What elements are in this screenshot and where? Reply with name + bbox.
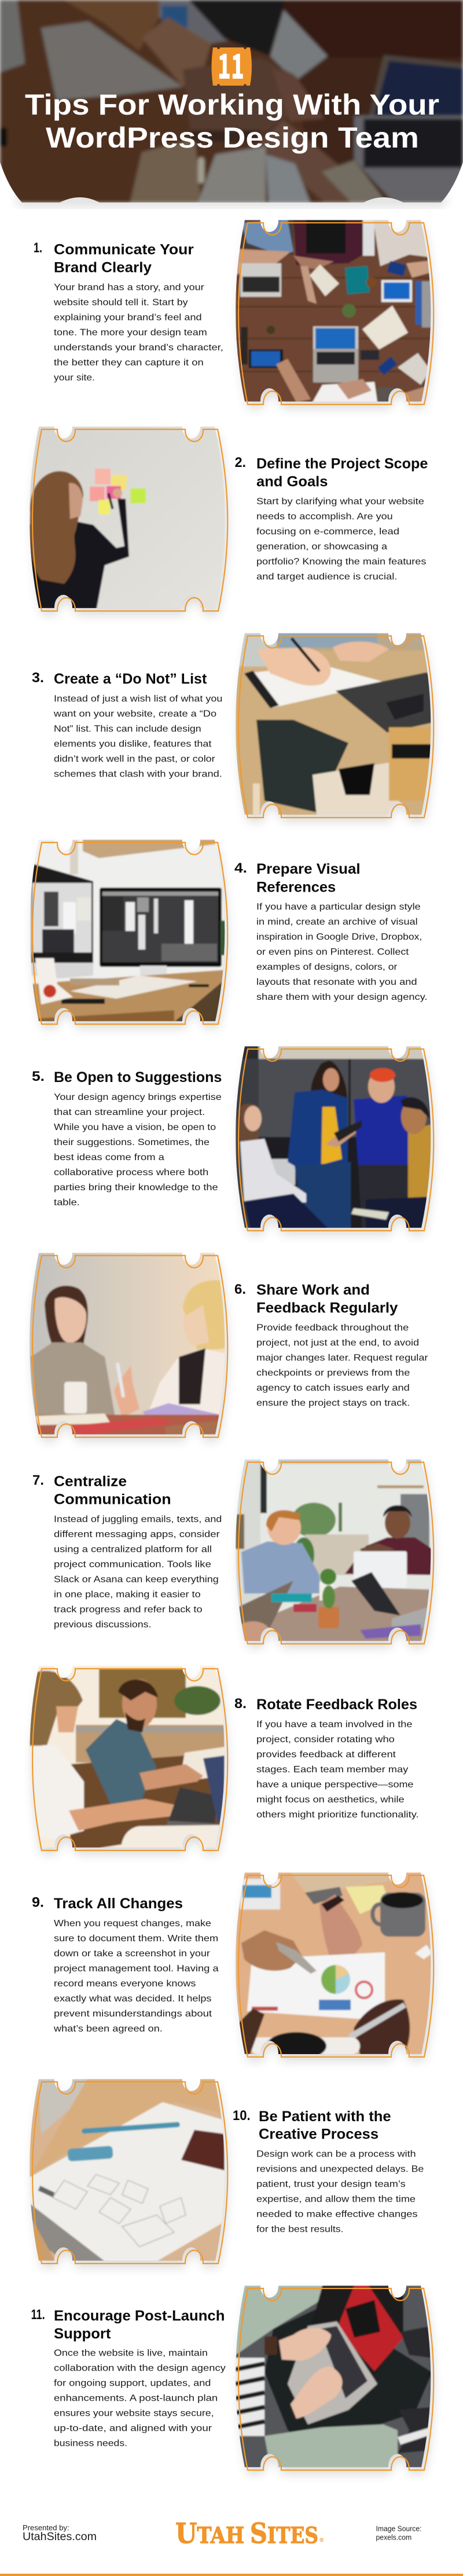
body text: layouts that resonate with you and — [256, 977, 417, 987]
body text: sure to document them. Write them — [54, 1934, 218, 1944]
body text: agency to catch issues early and — [256, 1383, 410, 1393]
photo: person typing on a laptop on their lap — [236, 2286, 432, 2468]
number: 6. — [234, 1282, 246, 1297]
footer: Utah Sites logo — [175, 2518, 324, 2550]
panel: header — [0, 0, 463, 203]
heading: References — [256, 879, 336, 896]
body text: table. — [54, 1198, 80, 1208]
card shadow — [32, 433, 227, 615]
photo: two people typing on laptops at a cafe — [30, 1666, 226, 1848]
photo: hands reviewing charts on a table — [236, 1872, 432, 2060]
header shadow — [17, 194, 446, 207]
body text: in one place, making it easier to — [54, 1590, 201, 1600]
body text: provides feedback at different — [256, 1750, 396, 1760]
heading: Communicate Your — [54, 241, 194, 257]
body text: their suggestions. Sometimes, the — [54, 1138, 210, 1147]
body text: or even pins on Pinterest. Collect — [256, 947, 409, 957]
body text: needed to make effective changes — [256, 2210, 418, 2220]
panel: tip 11 — [31, 2286, 433, 2474]
body text — [53, 1919, 219, 2034]
body text — [54, 1515, 222, 1630]
panel: tip 2 — [30, 426, 428, 615]
body text: and target audience is crucial. — [256, 572, 397, 582]
panel: tip 7 — [32, 1459, 433, 1648]
body text: schemes that clash with your brand. — [54, 770, 222, 779]
heading: Communication — [54, 1491, 171, 1507]
footer: image source: pexels.com — [376, 2533, 411, 2541]
body text: project, consider rotating who — [256, 1735, 395, 1745]
photo: team at wooden table from above — [236, 220, 432, 402]
body text: major changes later. Request regular — [256, 1353, 428, 1363]
heading — [54, 2308, 225, 2342]
body text: collaboration with the design agency — [54, 2364, 226, 2373]
body text: If you have a particular design style — [256, 902, 421, 912]
footer: image source: Image Source: — [376, 2525, 421, 2533]
body text: parties bring their knowledge to the — [54, 1183, 218, 1193]
body text — [54, 2349, 226, 2449]
body text: portfolio? Knowing the main features — [256, 557, 426, 567]
footer: image source — [376, 2525, 421, 2541]
body text: previous discussions. — [54, 1620, 151, 1630]
number: 4. — [234, 860, 247, 876]
body text: enhancements. A post-launch plan — [54, 2394, 218, 2404]
body text — [53, 282, 223, 382]
card shadow — [32, 1260, 227, 1441]
body text — [256, 1720, 419, 1820]
heading: Track All Changes — [54, 1896, 183, 1912]
body text: needs to accomplish. Are you — [256, 511, 393, 522]
heading: Prepare Visual — [256, 861, 361, 877]
footer: presented by: Presented by: — [23, 2523, 69, 2532]
body text: for the best results. — [256, 2225, 344, 2235]
heading — [54, 1474, 171, 1507]
body text: expertise, and allow them the time — [256, 2195, 416, 2205]
number: 3. — [32, 670, 44, 686]
footer: presented by — [23, 2523, 97, 2543]
body text: focusing on e-commerce, lead — [256, 527, 399, 537]
card shadow — [238, 227, 433, 409]
body text: might focus on aesthetics, while — [256, 1795, 405, 1805]
body text — [256, 1323, 428, 1408]
body text: Provide feedback throughout the — [256, 1323, 409, 1333]
body text: the better they can capture it on — [54, 358, 204, 367]
body text: Not” list. This can include design — [54, 724, 201, 734]
card outline — [32, 1669, 227, 1850]
body text: using a centralized platform for all — [54, 1545, 212, 1555]
body text: Slack or Asana can keep everything — [54, 1575, 219, 1585]
heading: Support — [54, 2325, 111, 2342]
card outline — [32, 842, 227, 1024]
footer: Utah Sites logo: SITES — [250, 2518, 318, 2550]
title: Tips For Working With Your — [25, 89, 439, 121]
body text: project management tool. Having a — [54, 1964, 219, 1974]
card outline — [32, 1256, 227, 1437]
body text: While you have a vision, be open to — [54, 1123, 216, 1132]
photo: four colleagues chatting in an office — [236, 1046, 432, 1228]
body text: tone. The more your design team — [54, 327, 207, 337]
number: 9. — [32, 1894, 44, 1911]
body text: for ongoing support, updates, and — [54, 2379, 211, 2389]
panel: tip 6 — [30, 1253, 428, 1441]
number: 5. — [32, 1069, 45, 1084]
card shadow — [238, 1466, 433, 1648]
body text: collaborative process where both — [54, 1168, 208, 1177]
body text: Start by clarifying what your website — [256, 496, 424, 507]
body text: Design work can be a process with — [256, 2150, 416, 2159]
number: 11. — [31, 2307, 45, 2323]
photo: two women in conversation — [30, 1253, 226, 1435]
body text: what’s been agreed on. — [53, 2024, 163, 2034]
card shadow — [32, 847, 227, 1028]
card shadow — [238, 1053, 433, 1235]
number: 8. — [234, 1696, 247, 1712]
body text: checkpoints or previews from the — [256, 1368, 410, 1378]
body text: share them with your design agency. — [256, 992, 427, 1002]
body text: stages. Each team member may — [256, 1765, 408, 1775]
body text: project, not just at the end, to avoid — [256, 1338, 419, 1348]
body text — [256, 2150, 424, 2235]
body text: examples of designs, colors, or — [256, 962, 398, 972]
card outline — [238, 1462, 433, 1644]
body text: explaining your brand’s feel and — [54, 312, 202, 322]
card outline — [238, 636, 433, 818]
body text: If you have a team involved in the — [256, 1720, 413, 1729]
body text: your site. — [54, 373, 95, 382]
heading: Share Work and — [256, 1282, 370, 1298]
footer: presented by: UtahSites.com — [23, 2531, 97, 2543]
body text — [54, 1092, 222, 1208]
panel: tip 10 — [30, 2079, 424, 2268]
panel: tip 9 — [32, 1872, 433, 2061]
panel: tip 4 — [30, 840, 427, 1028]
body text: down or take a screenshot in your — [54, 1949, 211, 1959]
body text: didn’t work well in the past, or color — [54, 755, 215, 764]
body text: website should tell it. Start by — [53, 297, 188, 307]
body text: elements you dislike, features that — [54, 739, 212, 749]
body text: others might prioritize functionality. — [256, 1810, 419, 1820]
body text: When you request changes, make — [54, 1919, 211, 1929]
panel: tip 1 — [34, 220, 433, 409]
body text: Your design agency brings expertise — [54, 1092, 222, 1102]
panel: tip 8 — [30, 1666, 419, 1854]
heading — [54, 241, 194, 275]
number: 10. — [233, 2108, 251, 2124]
card outline — [238, 223, 433, 404]
heading — [256, 456, 428, 490]
heading: Feedback Regularly — [256, 1300, 398, 1316]
heading: Centralize — [54, 1474, 127, 1490]
panel: tip 3 — [32, 633, 433, 822]
body text: project communication. Tools like — [54, 1560, 211, 1570]
body text: exactly what was decided. It helps — [54, 1994, 211, 2004]
body text — [53, 694, 222, 779]
card outline — [238, 2288, 433, 2470]
body text: want on your website, create a “Do — [53, 709, 216, 719]
panel: tip 5 — [32, 1046, 433, 1235]
card shadow — [32, 2086, 227, 2268]
body text: revisions and unexpected delays. Be — [256, 2165, 424, 2174]
body text: generation, or showcasing a — [256, 542, 387, 552]
card outline — [32, 429, 227, 611]
body text: up-to-date, and aligned with your — [54, 2424, 212, 2434]
heading: Brand Clearly — [54, 259, 152, 275]
body text: in mind, create an archive of visual — [256, 917, 418, 927]
photo: colleagues meeting around laptops — [236, 1459, 432, 1644]
body text: inspiration in Google Drive, Dropbox, — [256, 932, 422, 942]
body text: that can streamline your project. — [54, 1107, 205, 1117]
badge: number 11: 11 — [218, 39, 244, 89]
photo: woman placing sticky notes on a wall — [30, 426, 226, 609]
body text: ensure the project stays on track. — [256, 1399, 410, 1408]
footer bar — [0, 2574, 463, 2576]
footer: Utah Sites logo: UTAH — [175, 2518, 244, 2550]
body text: ensures your website stays secure, — [54, 2409, 214, 2419]
body text — [256, 902, 427, 1002]
heading: Create a “Do Not” List — [54, 671, 207, 687]
body text: understands your brand’s character, — [54, 343, 223, 352]
heading: Be Patient with the — [259, 2108, 391, 2125]
card shadow — [238, 2292, 433, 2474]
number: 2. — [235, 455, 246, 470]
heading — [256, 861, 361, 896]
heading: Be Open to Suggestions — [54, 1069, 222, 1085]
number: 1. — [34, 240, 42, 256]
header photo: hands stacked over a table — [0, 0, 463, 203]
photo: two monitors on a wooden desk — [30, 840, 226, 1022]
body text: have a unique perspective—some — [256, 1780, 414, 1790]
title: WordPress Design Team — [46, 122, 419, 154]
heading: Creative Process — [259, 2126, 379, 2143]
card outline — [238, 1049, 433, 1231]
heading: and Goals — [256, 473, 328, 490]
heading — [259, 2108, 391, 2143]
number: 7. — [32, 1473, 44, 1488]
body text: track progress and refer back to — [54, 1605, 203, 1615]
heading: Encourage Post-Launch — [54, 2308, 225, 2324]
body text: Once the website is live, maintain — [54, 2349, 208, 2358]
body text: business needs. — [54, 2439, 127, 2449]
body text: Your brand has a story, and your — [54, 282, 204, 292]
card outline — [32, 2082, 227, 2264]
body text: patient, trust your design team’s — [256, 2180, 406, 2189]
body text — [256, 496, 426, 582]
card shadow — [238, 1879, 433, 2061]
heading: Rotate Feedback Roles — [256, 1697, 417, 1713]
photo: hand writing in notebook beside a laptop — [236, 633, 432, 815]
body text: Instead of juggling emails, texts, and — [54, 1515, 222, 1525]
body text: different messaging apps, consider — [54, 1530, 220, 1540]
card outline — [238, 1875, 433, 2057]
body text: Instead of just a wish list of what you — [54, 694, 222, 704]
title — [25, 89, 439, 154]
body text: record means everyone knows — [54, 1979, 196, 1989]
heading — [256, 1282, 398, 1316]
body text: prevent misunderstandings about — [54, 2009, 212, 2019]
heading: Define the Project Scope — [256, 456, 428, 472]
photo: wireframe sketch on notebook with pens — [30, 2079, 226, 2261]
footer: Utah Sites logo: ® — [319, 2537, 324, 2544]
body text: best ideas come from a — [54, 1153, 164, 1162]
card shadow — [238, 640, 433, 822]
card shadow — [32, 1673, 227, 1854]
